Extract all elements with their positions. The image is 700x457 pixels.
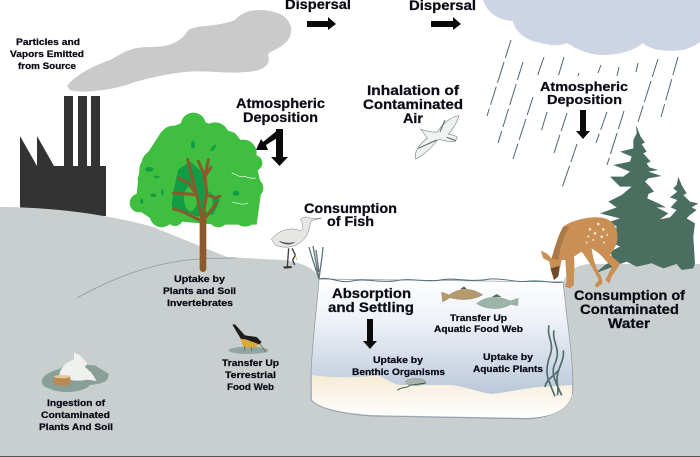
smoke plume (67, 10, 291, 92)
label: transfer up aquatic food web (434, 313, 523, 335)
label: particles and vapors (10, 37, 84, 72)
arrow: settling (363, 319, 377, 349)
arrows: atmospheric deposition to tree and ground (256, 129, 288, 166)
icon: green fish (477, 294, 518, 309)
label: ingestion of contaminated plants and soil: Contaminated (41, 410, 110, 421)
label: inhalation of contaminated air: Air (403, 111, 424, 126)
label: uptake by aquatic plants: Uptake by (483, 352, 534, 363)
arrow: dispersal left (307, 17, 336, 30)
icon: songbird (228, 324, 268, 354)
label: consumption of contaminated water: Consumption of (574, 287, 685, 303)
label: particles and vapors: Vapors Emitted (10, 49, 84, 60)
lake water (311, 279, 573, 419)
label: uptake by plants and soil invertebrates: Uptake by (174, 274, 226, 285)
label: uptake by plants and soil invertebrates (163, 274, 236, 309)
bottom border (0, 456, 700, 457)
icon: gull (415, 116, 459, 159)
label: uptake by aquatic plants (473, 352, 543, 375)
label: inhalation of contaminated air: Inhalation of (367, 83, 460, 98)
label: ingestion of contaminated plants and soil: Ingestion of (47, 398, 106, 409)
icon: benthic organism (397, 379, 426, 390)
label: ingestion of contaminated plants and soil (39, 398, 113, 433)
label: inhalation of contaminated air: Contaminated (363, 97, 463, 112)
evergreen trees (595, 125, 698, 273)
label: consumption of contaminated water: Contaminated (580, 301, 679, 317)
label: transfer up terrestrial food web: Terrestrial (225, 370, 276, 381)
tree canopy and trunk (130, 113, 263, 269)
label: ingestion of contaminated plants and soil: Plants And Soil (39, 422, 113, 433)
label: atmospheric deposition left: Atmospheric (236, 96, 326, 111)
label: uptake by plants and soil invertebrates: Invertebrates (167, 298, 233, 309)
lake sand bed (312, 375, 572, 418)
label: transfer up terrestrial food web: Food Web (227, 382, 274, 393)
label: atmospheric deposition left (236, 96, 326, 125)
arrow: atmospheric deposition over rain (576, 110, 590, 139)
ground and lake shoreline (0, 207, 700, 457)
label: uptake by benthic organisms: Uptake by (373, 355, 424, 366)
label: atmospheric deposition left: Deposition (243, 110, 318, 125)
label: absorption and settling: and Settling (328, 299, 414, 315)
icon: reeds (309, 246, 323, 279)
label: particles and vapors: from Source (18, 61, 76, 72)
hill contour line (77, 258, 236, 298)
icon: rabbit (42, 352, 109, 392)
label: atmospheric deposition right: Deposition (547, 92, 622, 107)
icon: aquatic plants (545, 325, 564, 396)
label: atmospheric deposition right: Atmospheric (540, 79, 628, 94)
factory (20, 96, 106, 216)
icon: trout (442, 286, 483, 302)
label: absorption and settling: Absorption (332, 285, 411, 301)
label: consumption of fish (304, 201, 397, 229)
label: uptake by plants and soil invertebrates: Plants and Soil (163, 286, 236, 297)
icon: deer (541, 217, 620, 288)
label: inhalation of contaminated air (363, 83, 463, 126)
label: uptake by aquatic plants: Aquatic Plants (473, 364, 543, 375)
label: particles and vapors: Particles and (16, 37, 80, 48)
label: consumption of contaminated water: Water (608, 315, 651, 331)
label: consumption of fish: of Fish (327, 214, 374, 229)
label: uptake by benthic organisms: Benthic Organisms (352, 367, 445, 378)
label: transfer up terrestrial food web (222, 358, 279, 393)
label: consumption of contaminated water (574, 287, 685, 331)
rain cloud (483, 0, 700, 55)
label: absorption and settling (328, 285, 414, 315)
label: uptake by benthic organisms (352, 355, 445, 378)
label: transfer up aquatic food web: Transfer Up (450, 313, 507, 324)
rain streaks (487, 40, 678, 188)
label: consumption of fish: Consumption (304, 201, 397, 216)
label: transfer up aquatic food web: Aquatic Food Web (434, 324, 523, 335)
icon: heron (271, 217, 322, 269)
arrow: dispersal right (431, 17, 461, 30)
label: transfer up terrestrial food web: Transfer Up (222, 358, 279, 369)
label: atmospheric deposition right (540, 79, 628, 107)
water surface (319, 278, 563, 283)
